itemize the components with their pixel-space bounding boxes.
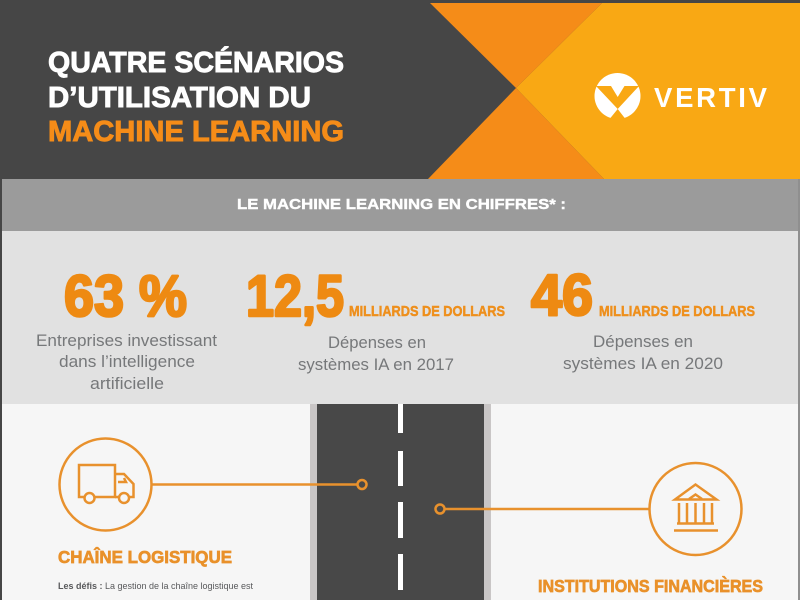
connector: supply chain [152,480,366,489]
heading: financial institutions: INSTITUTIONS FINANCIÈRES [538,575,763,596]
stat: 63 %: dans l’intelligence [59,353,195,371]
section band: heading [0,179,800,231]
panel: financial institutions [538,463,763,596]
stat: 12,5 milliards: Dépenses en [328,334,426,352]
stat: 46 milliards: systèmes IA en 2020 [563,355,723,373]
road [310,404,491,600]
stat: 46 milliards [531,263,755,373]
stat: 12,5 milliards [246,264,505,374]
yellow header panel [516,3,800,179]
lower orange triangle [428,88,604,179]
logo: Vertiv [594,73,768,121]
stat: 46 milliards: MILLIARDS DE DOLLARS [599,303,755,320]
header banner [0,0,800,179]
panel: key figures [0,231,800,404]
title: QUATRE SCÉNARIOS [48,45,344,79]
stat: 12,5 milliards: MILLIARDS DE DOLLARS [349,303,505,320]
stat: 63 %: 63 % [64,264,187,329]
icon: truck in circle [60,438,152,530]
upper orange triangle [430,3,602,88]
connector: financial institutions [436,504,649,514]
stat: 46 milliards: 46 [531,263,593,328]
title: MACHINE LEARNING [48,116,344,148]
title: D’UTILISATION DU [48,82,311,114]
stat: 63 % [36,264,217,393]
title [48,45,344,148]
stat: 63 %: Entreprises investissant [36,332,217,350]
icon: bank in circle [650,463,742,555]
text block: challenges: Les défis : La gestion de la chaîne logistique est [58,581,253,592]
stat: 12,5 milliards: 12,5 [246,264,344,329]
logo: Vertiv: VERTIV [654,82,768,113]
stat: 12,5 milliards: systèmes IA en 2017 [298,356,454,374]
stat: 46 milliards: Dépenses en [593,333,693,351]
section band: heading: LE MACHINE LEARNING EN CHIFFRES* : [237,196,566,213]
stat: 63 %: artificielle [90,375,164,393]
heading: supply chain: CHAÎNE LOGISTIQUE [58,546,232,567]
panel: supply chain [58,438,253,592]
